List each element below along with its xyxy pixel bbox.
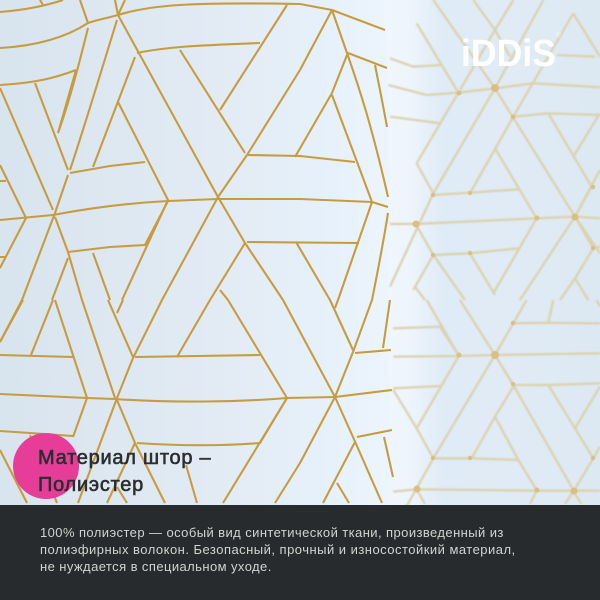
front curtain — [0, 0, 393, 505]
blurred pale gold pattern — [388, 0, 600, 530]
heading: Материал штор – — [38, 447, 211, 469]
logo: iDDiS: iDDiS — [461, 33, 556, 75]
pink circle accent — [13, 433, 79, 499]
pattern nodes — [412, 84, 595, 494]
heading — [38, 447, 211, 496]
description text: не нуждается в специальном уходе. — [40, 559, 272, 574]
description text: 100% полиэстер — особый вид синтетической ткани, произведенный из — [40, 525, 504, 540]
gold geometric pattern — [0, 0, 393, 503]
right background curtain — [375, 0, 600, 530]
dark description panel — [0, 505, 600, 600]
heading: Полиэстер — [38, 474, 144, 496]
description text: полиэфирных волокон. Безопасный, прочный и износостойкий материал, — [40, 542, 516, 557]
description text — [40, 525, 516, 574]
logo: iDDiS: ® — [556, 31, 562, 39]
